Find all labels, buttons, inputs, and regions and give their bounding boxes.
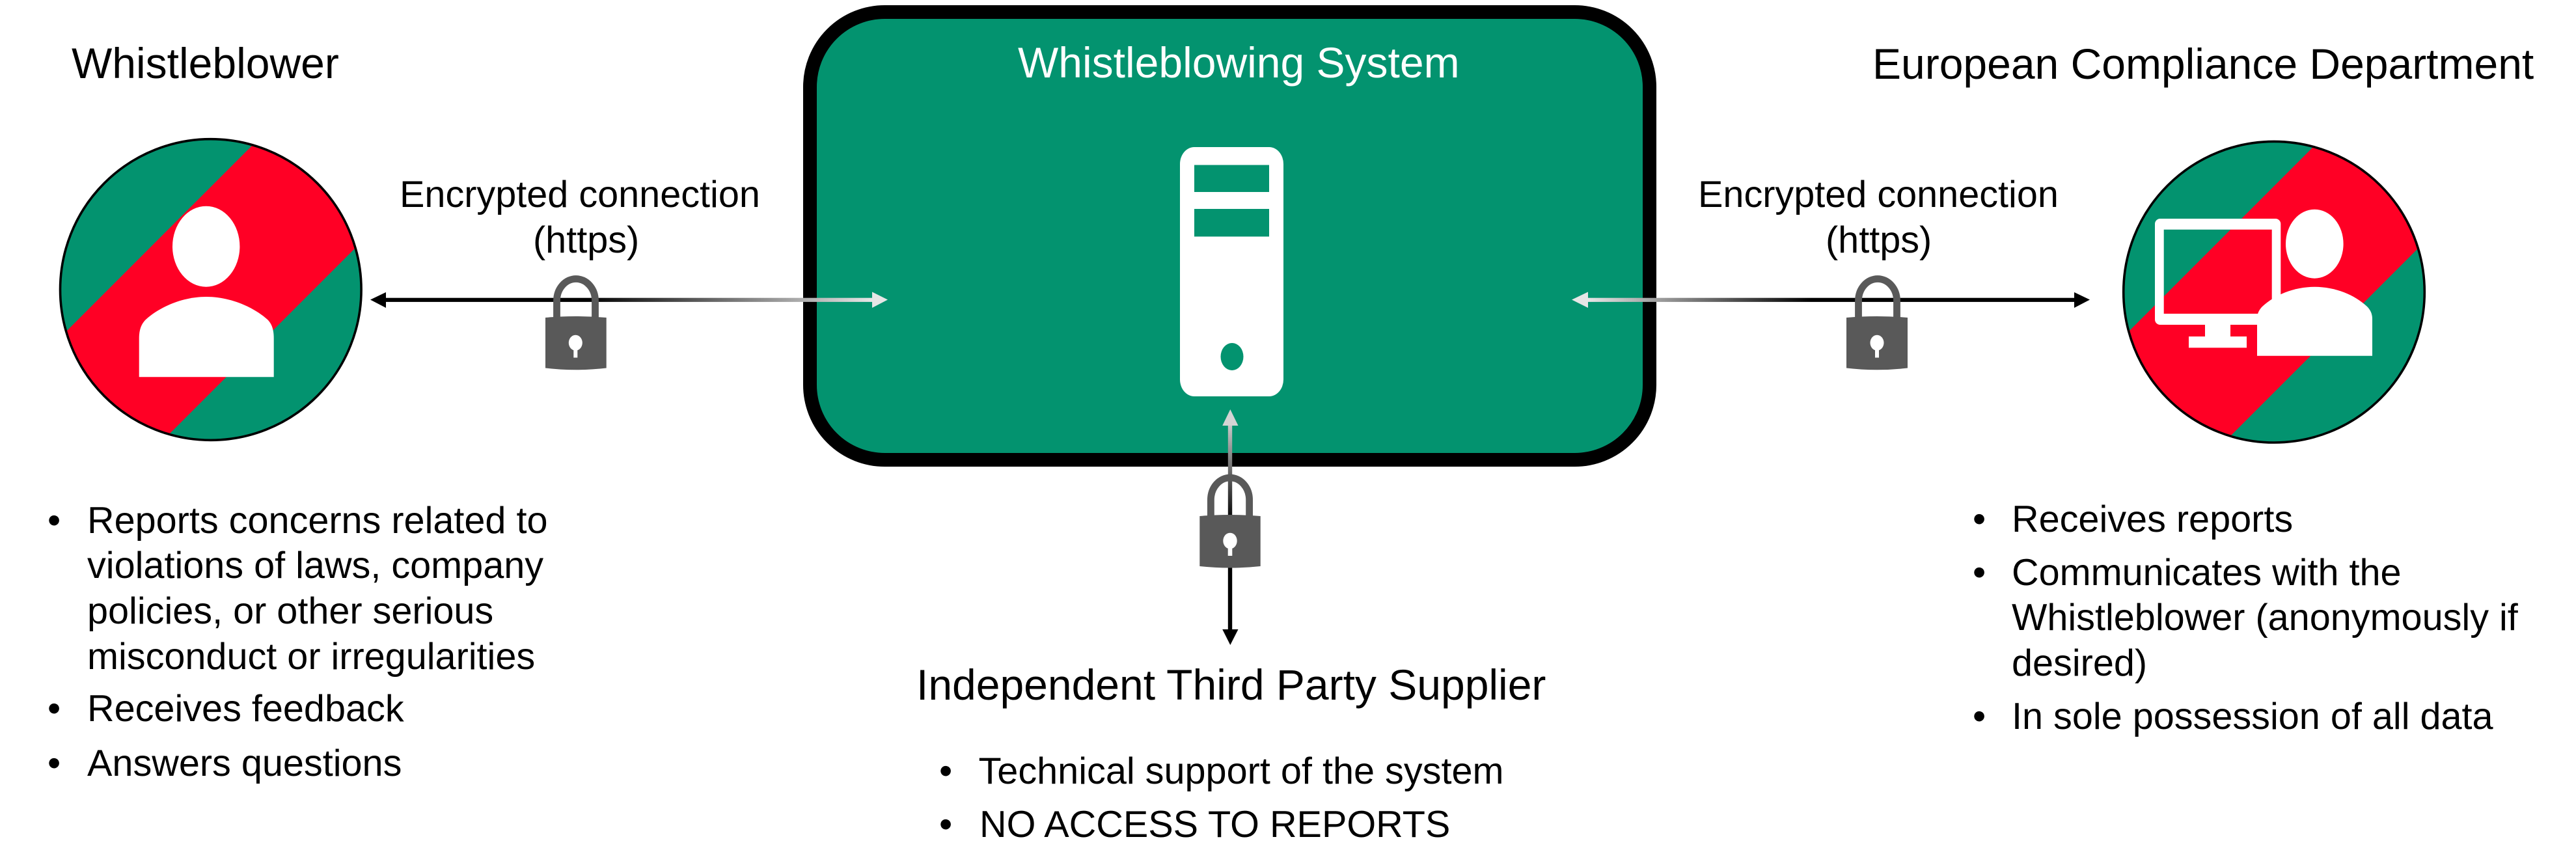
bullet list: whistleblower duties xyxy=(48,500,548,784)
panel: european compliance department xyxy=(1872,40,2534,737)
bullet list: whistleblower duties: Receives feedback xyxy=(87,688,404,730)
label: encrypted connection left xyxy=(400,174,760,261)
bullet list: whistleblower duties: violations of laws, company xyxy=(87,545,543,586)
bullet list: whistleblower duties: Reports concerns related to xyxy=(87,500,548,541)
panel: independent third party supplier xyxy=(916,661,1546,845)
bullet list: supplier role xyxy=(939,750,1503,845)
system box xyxy=(810,12,1649,459)
bullet list: compliance duties: In sole possession of all data xyxy=(2012,696,2494,737)
bullet list: compliance duties: • xyxy=(1973,552,1986,594)
bullet list: compliance duties: Communicates with the xyxy=(2012,552,2402,594)
label: encrypted connection right xyxy=(1698,174,2059,261)
label: encrypted connection right: Encrypted connection xyxy=(1698,174,2059,215)
bullet list: compliance duties: Receives reports xyxy=(2012,499,2293,540)
panel: whistleblower xyxy=(35,39,548,784)
label: encrypted connection left: (https) xyxy=(533,219,639,261)
icon: whistleblower avatar xyxy=(59,138,363,441)
bullet list: whistleblower duties: • xyxy=(48,500,61,541)
icon: server tower xyxy=(1180,147,1283,396)
arrow: system to supplier xyxy=(1222,409,1238,645)
heading: independent third party supplier: Independent Third Party Supplier xyxy=(916,661,1546,709)
label: encrypted connection left: Encrypted connection xyxy=(400,174,760,215)
icon: monitor xyxy=(2155,219,2281,348)
bullet list: supplier role: • xyxy=(939,750,952,792)
icon: padlock right xyxy=(1846,279,1908,370)
bullet list: supplier role: NO ACCESS TO REPORTS xyxy=(980,804,1450,845)
bullet list: whistleblower duties: misconduct or irregularities xyxy=(87,636,535,678)
bullet list: compliance duties xyxy=(1973,499,2519,737)
icon: compliance officer avatar xyxy=(2122,141,2426,444)
bullet list: whistleblower duties: • xyxy=(48,743,61,784)
icon: padlock bottom xyxy=(1199,478,1261,568)
bullet list: supplier role: Technical support of the system xyxy=(979,750,1503,792)
heading: european compliance department: European Compliance Department xyxy=(1872,40,2534,88)
bullet list: compliance duties: desired) xyxy=(2012,642,2147,684)
bullet list: compliance duties: Whistleblower (anonymously if xyxy=(2012,597,2519,638)
bullet list: compliance duties: • xyxy=(1973,499,1986,540)
heading: whistleblower: Whistleblower xyxy=(72,39,339,87)
arrow: compliance to system xyxy=(1572,292,2090,308)
arrow: whistleblower to system xyxy=(370,292,888,308)
bullet list: whistleblower duties: • xyxy=(48,688,61,730)
bullet list: whistleblower duties: policies, or other serious xyxy=(87,590,493,632)
panel: whistleblowing system xyxy=(810,12,1649,459)
bullet list: whistleblower duties: Answers questions xyxy=(87,743,402,784)
icon: padlock left xyxy=(545,279,607,370)
heading: whistleblowing system: Whistleblowing System xyxy=(1018,38,1460,87)
bullet list: supplier role: • xyxy=(939,804,952,845)
bullet list: compliance duties: • xyxy=(1973,696,1986,737)
label: encrypted connection right: (https) xyxy=(1826,219,1932,261)
